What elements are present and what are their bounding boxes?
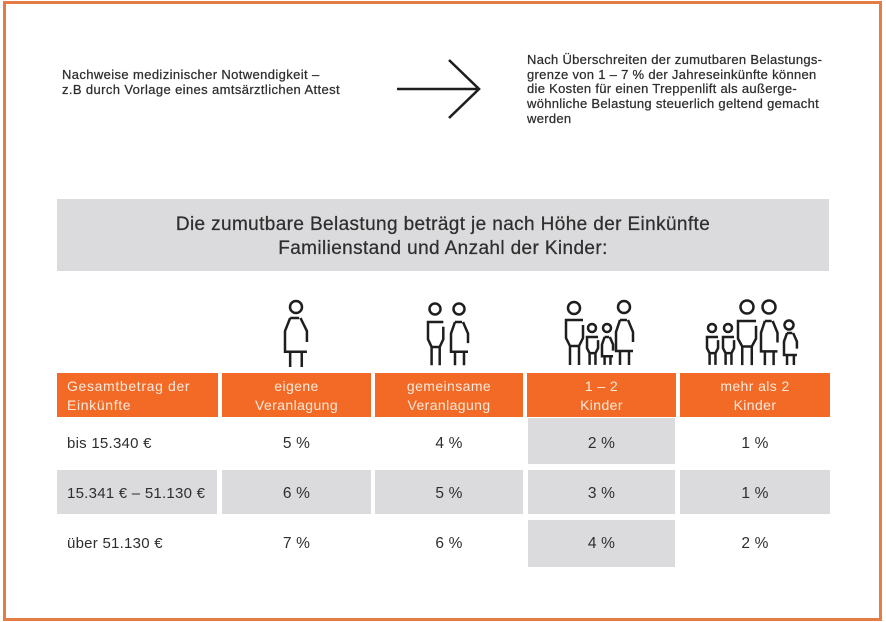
row 3 label: über 51.130 € xyxy=(67,535,163,552)
table header: more than 2 children: mehr als 2 xyxy=(720,378,790,394)
text: tax deduction: Nach Überschreiten der zumutbaren Belastungs- xyxy=(527,52,822,67)
highlighted column: 1-2 children xyxy=(528,418,675,464)
row 2 value: 5 % xyxy=(435,485,463,502)
row 3 value: 7 % xyxy=(283,535,310,552)
table header: income xyxy=(57,373,218,417)
row 3 value: 2 % xyxy=(741,535,769,552)
row 3 value: 6 % xyxy=(435,535,463,552)
table header: income: Gesamtbetrag der xyxy=(67,378,190,394)
icon: arrow xyxy=(397,59,481,119)
text: tax deduction: grenze von 1 – 7 % der Jahreseinkünfte können xyxy=(527,67,817,82)
table header: individual assessment: eigene xyxy=(274,378,319,394)
table header: joint assessment xyxy=(375,373,523,417)
row 2 value: 1 % xyxy=(741,485,769,502)
icon: family with more than 2 children xyxy=(707,300,797,365)
row 1 value: 1 % xyxy=(741,435,769,452)
text: tax deduction xyxy=(526,52,822,126)
table header: more than 2 children xyxy=(680,373,830,417)
row 2 value: 6 % xyxy=(283,485,310,502)
table header: individual assessment: Veranlagung xyxy=(255,396,338,412)
row 2 label: 15.341 € – 51.130 € xyxy=(67,485,205,502)
table header: joint assessment: Veranlagung xyxy=(407,396,491,412)
row 2 background cells xyxy=(57,470,217,514)
row 1 label: bis 15.340 € xyxy=(67,435,152,452)
text: tax deduction: wöhnliche Belastung steuerlich geltend gemacht xyxy=(527,96,819,111)
heading banner xyxy=(57,199,829,271)
table header: 1-2 children: Kinder xyxy=(580,396,623,412)
heading banner: Die zumutbare Belastung beträgt je nach Höhe der Einkünfte xyxy=(176,214,710,235)
icon: couple xyxy=(428,304,468,365)
table header: individual assessment xyxy=(222,373,371,417)
text: tax deduction: die Kosten für einen Treppenlift als außerge- xyxy=(527,81,797,96)
text: medical necessity xyxy=(62,67,340,97)
row 1 value: 2 % xyxy=(588,435,615,452)
heading banner: Familienstand und Anzahl der Kinder: xyxy=(278,238,608,259)
table header: more than 2 children: Kinder xyxy=(734,396,776,412)
icons: household figures xyxy=(284,299,798,367)
text: medical necessity: Nachweise medizinischer Notwendigkeit – xyxy=(62,67,320,82)
row 1 value: 4 % xyxy=(435,435,463,452)
row 1 value: 5 % xyxy=(283,435,310,452)
table header: joint assessment: gemeinsame xyxy=(407,378,491,394)
table header: 1-2 children xyxy=(527,373,676,417)
table header: 1-2 children: 1 – 2 xyxy=(585,378,618,394)
row 2 value: 3 % xyxy=(588,485,615,502)
icon: family with 1-2 children xyxy=(566,301,633,365)
table header: income: Einkünfte xyxy=(67,396,131,412)
icon: single woman xyxy=(285,301,307,367)
text: tax deduction: werden xyxy=(527,111,571,126)
row 3 value: 4 % xyxy=(588,535,615,552)
text: medical necessity: z.B durch Vorlage eines amtsärztlichen Attest xyxy=(62,82,340,96)
